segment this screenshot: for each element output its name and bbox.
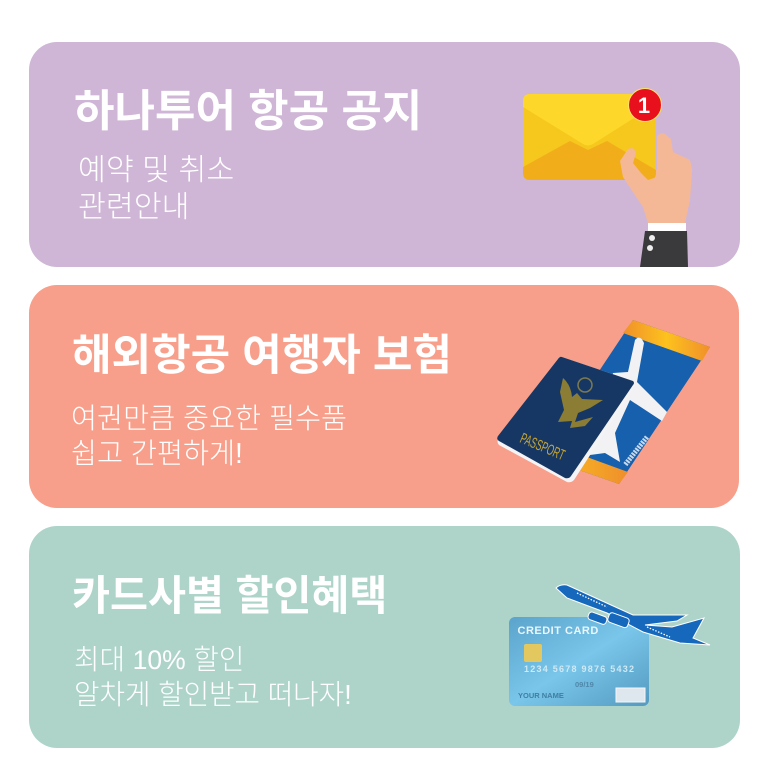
text: discount description: 알차게 할인받고 떠나자! <box>74 679 352 710</box>
label: card holder: YOUR NAME <box>518 691 564 700</box>
panel: travel insurance <box>29 285 739 508</box>
text: discount description: 최대 10% 할인 <box>74 644 244 675</box>
panel: airline notice <box>29 42 740 267</box>
icon: envelope held by hand <box>523 88 692 267</box>
icon: credit card and airplane <box>509 585 710 706</box>
text: notice description: 예약 및 취소 <box>78 154 234 187</box>
panel: card discounts <box>29 526 740 748</box>
icon: passport and boarding ticket <box>497 320 710 484</box>
label: credit card: CREDIT CARD <box>518 625 599 637</box>
text: insurance description: 여권만큼 중요한 필수품 <box>71 402 347 434</box>
text: insurance description: 쉽고 간편하게! <box>71 437 243 469</box>
label: passport cover text: PASSPORT <box>517 430 567 464</box>
label: card number: 1234 5678 9876 5432 <box>524 664 634 674</box>
label: notification count: 1 <box>638 93 650 118</box>
heading: travel insurance: 해외항공 여행자 보험 <box>72 332 452 380</box>
label: expiry: 09/19 <box>575 680 594 689</box>
heading: card discounts: 카드사별 할인혜택 <box>72 573 387 619</box>
text: notice description: 관련안내 <box>78 191 190 224</box>
heading: airline notice: 하나투어 항공 공지 <box>74 87 422 136</box>
